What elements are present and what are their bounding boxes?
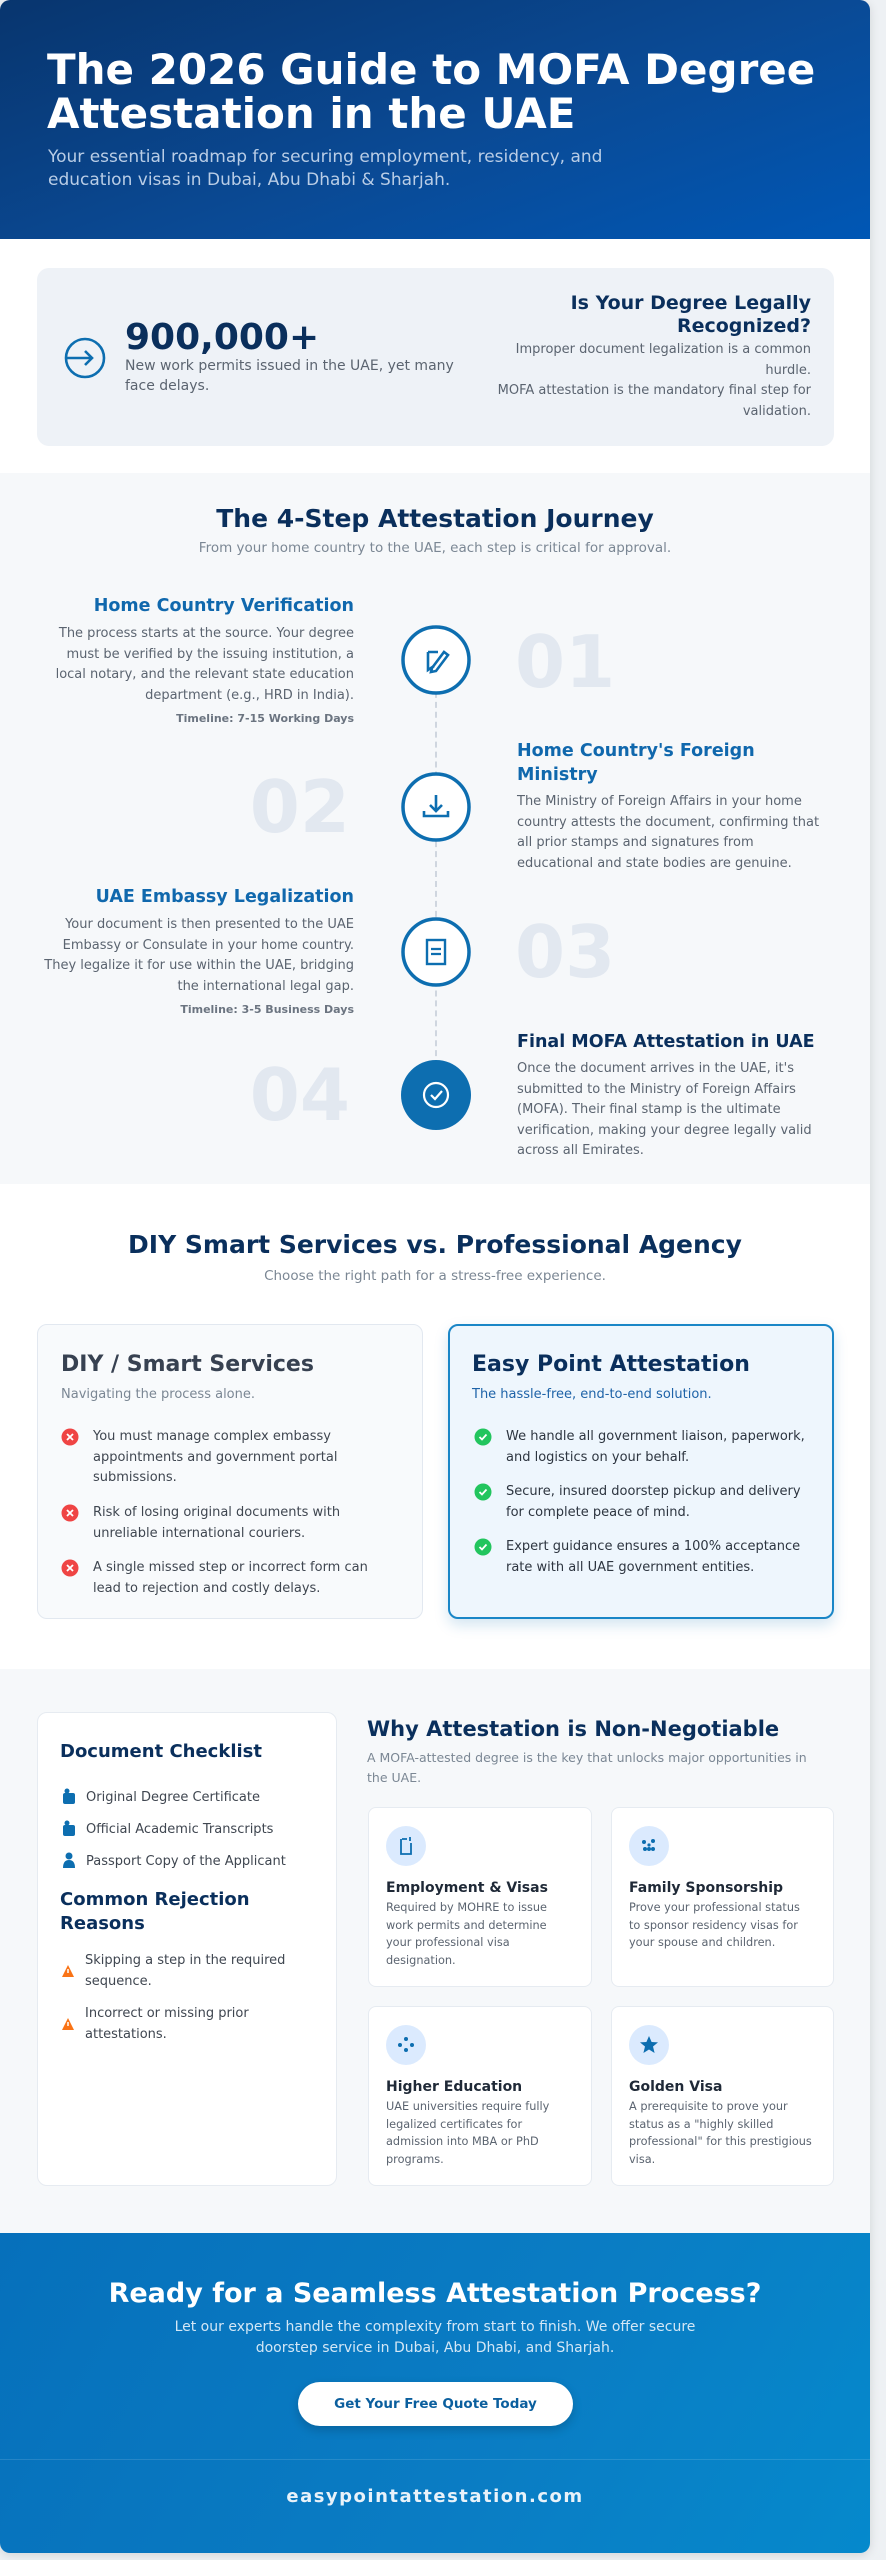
body: UAE universities require fully bbox=[386, 2100, 549, 2113]
body: your spouse and children. bbox=[629, 1936, 775, 1949]
step 1 text: Timeline: 7-15 Working Days bbox=[176, 712, 354, 725]
step 1 text: The process starts at the source. Your degree bbox=[59, 626, 354, 641]
title: Family Sponsorship bbox=[629, 1880, 783, 1896]
header banner bbox=[0, 0, 870, 239]
icon: dots bbox=[386, 2025, 426, 2065]
heading: The 4-Step Attestation Journey bbox=[216, 504, 654, 533]
comparison subheading: Choose the right path for a stress-free experience. bbox=[264, 1268, 606, 1284]
panel: checklist bbox=[37, 1712, 337, 2186]
checklist items bbox=[63, 1788, 286, 1869]
step 2 text: educational and state bodies are genuine. bbox=[517, 856, 792, 870]
step 3 text bbox=[44, 887, 354, 1016]
step 4 text: verification, making your degree legally valid bbox=[517, 1122, 812, 1138]
subheading: From your home country to the UAE, each step is critical for approval. bbox=[199, 540, 671, 556]
body: professional" for this prestigious bbox=[629, 2135, 812, 2148]
body: programs. bbox=[386, 2152, 444, 2166]
item 1: We handle all government liaison, paperwork, bbox=[506, 1429, 805, 1444]
legal recognition text: Improper document legalization is a common bbox=[516, 342, 811, 357]
subtitle: education visas in Dubai, Abu Dhabi & Sharjah. bbox=[48, 170, 450, 190]
card subtitle: Navigating the process alone. bbox=[61, 1387, 255, 1402]
step number 04: 04 bbox=[250, 1053, 350, 1137]
step 2 text: Ministry bbox=[517, 765, 598, 785]
rejection heading bbox=[60, 1889, 250, 1934]
checklist heading: Document Checklist bbox=[60, 1741, 262, 1762]
step 4 text bbox=[517, 1032, 815, 1158]
item 2 bbox=[474, 1484, 801, 1520]
title: Employment & Visas bbox=[386, 1880, 548, 1896]
step 1 text: local notary, and the relevant state education bbox=[56, 667, 354, 682]
why heading: Why Attestation is Non-Negotiable bbox=[367, 1717, 779, 1741]
step 4 text: Once the document arrives in the UAE, it's bbox=[517, 1061, 794, 1076]
body: Required by MOHRE to issue bbox=[386, 1901, 547, 1914]
title: Attestation in the UAE bbox=[47, 89, 575, 138]
icon: arrow circle bbox=[64, 338, 106, 378]
item 3 bbox=[474, 1538, 800, 1574]
icon: star bbox=[629, 2025, 669, 2065]
icon: step 3 circle bbox=[401, 917, 471, 987]
rejection item 2 bbox=[62, 2006, 249, 2042]
step 4 text: (MOFA). Their final stamp is the ultimate bbox=[517, 1102, 781, 1117]
step number 02: 02 bbox=[250, 765, 350, 849]
item 2 bbox=[62, 1504, 340, 1540]
step 2 text bbox=[516, 741, 819, 870]
step 1 text: Home Country Verification bbox=[94, 596, 354, 616]
step number 03: 03 bbox=[515, 910, 615, 994]
item 3: Expert guidance ensures a 100% acceptance bbox=[506, 1539, 800, 1554]
panel: Easy Point card bbox=[448, 1324, 834, 1619]
card: golden visa bbox=[611, 2006, 834, 2186]
step 4 text: Final MOFA Attestation in UAE bbox=[517, 1032, 815, 1052]
card: higher education bbox=[368, 2006, 592, 2186]
CTA text: Let our experts handle the complexity from start to finish. We offer secure bbox=[175, 2319, 695, 2335]
subtitle bbox=[48, 147, 602, 190]
item 2: unreliable international couriers. bbox=[93, 1526, 305, 1540]
stat caption: face delays. bbox=[125, 378, 209, 394]
body: status as a "highly skilled bbox=[629, 2118, 773, 2130]
item 1: You must manage complex embassy bbox=[93, 1429, 331, 1444]
item 1 bbox=[474, 1428, 805, 1464]
body: to sponsor residency visas for bbox=[629, 1918, 798, 1932]
item 2: Risk of losing original documents with bbox=[93, 1505, 340, 1520]
body: A prerequisite to prove your bbox=[629, 2100, 788, 2113]
item 3: rate with all UAE government entities. bbox=[506, 1560, 754, 1574]
subtitle: Your essential roadmap for securing employment, residency, and bbox=[48, 147, 602, 167]
title bbox=[47, 45, 815, 138]
step 1 text: must be verified by the issuing institution, a bbox=[66, 646, 354, 662]
body bbox=[629, 1901, 800, 1949]
bottom section background bbox=[0, 1669, 870, 2233]
title: The 2026 Guide to MOFA Degree bbox=[47, 45, 815, 94]
step 4 text: submitted to the Ministry of Foreign Affairs bbox=[517, 1082, 796, 1096]
rejection item 1 bbox=[62, 1953, 285, 1988]
card: family bbox=[611, 1807, 834, 1987]
checklist items: Original Degree Certificate bbox=[86, 1790, 260, 1805]
step 4 text: across all Emirates. bbox=[517, 1143, 644, 1158]
comparison heading: DIY Smart Services vs. Professional Agency bbox=[128, 1230, 742, 1259]
body bbox=[386, 2100, 549, 2166]
step 3 text: They legalize it for use within the UAE, bridging bbox=[44, 958, 354, 973]
step 2 text: all prior stamps and signatures from bbox=[517, 835, 754, 850]
body bbox=[386, 1901, 547, 1966]
icon: people bbox=[629, 1826, 669, 1866]
item 1: appointments and government portal bbox=[93, 1450, 337, 1464]
body: Prove your professional status bbox=[629, 1901, 800, 1914]
body: designation. bbox=[386, 1954, 456, 1966]
body: admission into MBA or PhD bbox=[386, 2135, 539, 2148]
icon: step 4 filled circle bbox=[401, 1060, 471, 1130]
card title: Easy Point Attestation bbox=[472, 1352, 750, 1377]
body: work permits and determine bbox=[386, 1918, 547, 1932]
icon: step 1 circle bbox=[401, 625, 471, 695]
checklist items: Passport Copy of the Applicant bbox=[86, 1854, 286, 1869]
rejection item 2: Incorrect or missing prior bbox=[85, 2006, 249, 2021]
legal recognition text: validation. bbox=[743, 404, 811, 418]
step 2 text: Home Country's Foreign bbox=[517, 741, 755, 761]
item 3: lead to rejection and costly delays. bbox=[93, 1580, 320, 1596]
body: visa. bbox=[629, 2152, 655, 2166]
legal recognition text: Is Your Degree Legally bbox=[571, 292, 811, 314]
item 2: for complete peace of mind. bbox=[506, 1504, 690, 1520]
step 1 text bbox=[56, 596, 354, 725]
why subtext: A MOFA-attested degree is the key that unlocks major opportunities in bbox=[367, 1750, 807, 1765]
CTA button bbox=[298, 2382, 573, 2426]
step 3 text: UAE Embassy Legalization bbox=[96, 887, 354, 907]
step 3 text: the international legal gap. bbox=[177, 978, 354, 994]
item 2: Secure, insured doorstep pickup and delivery bbox=[506, 1484, 801, 1499]
card title: DIY / Smart Services bbox=[61, 1352, 314, 1377]
why subtext: the UAE. bbox=[367, 1770, 421, 1785]
CTA text bbox=[175, 2319, 695, 2356]
footer domain: easypointattestation.com bbox=[286, 2486, 584, 2507]
footer domain bbox=[0, 2459, 870, 2509]
legal recognition text bbox=[498, 292, 811, 418]
rejection item 2: attestations. bbox=[85, 2026, 167, 2042]
item 1: submissions. bbox=[93, 1470, 177, 1485]
panel: 4-step journey bbox=[0, 473, 870, 1184]
legal recognition text: hurdle. bbox=[765, 362, 811, 378]
CTA text: doorstep service in Dubai, Abu Dhabi, and Sharjah. bbox=[256, 2340, 614, 2356]
step 3 text: Timeline: 3-5 Business Days bbox=[180, 1003, 354, 1016]
step 3 text: Your document is then presented to the UAE bbox=[65, 917, 354, 932]
item 1 bbox=[62, 1428, 337, 1485]
CTA button: Get Your Free Quote Today bbox=[334, 2396, 537, 2412]
item 3: A single missed step or incorrect form can bbox=[93, 1560, 368, 1575]
stat number: 900,000+ bbox=[125, 317, 319, 358]
icon: document bbox=[386, 1826, 426, 1866]
item 1: and logistics on your behalf. bbox=[506, 1450, 689, 1464]
body bbox=[629, 2100, 812, 2166]
step number 01: 01 bbox=[515, 620, 615, 704]
stat caption bbox=[125, 358, 454, 394]
panel: DIY card bbox=[37, 1324, 423, 1619]
step 3 text: Embassy or Consulate in your home country. bbox=[63, 938, 354, 952]
item 3 bbox=[62, 1560, 368, 1596]
step 2 text: country attests the document, confirming that bbox=[517, 814, 819, 830]
panel: stat box bbox=[37, 268, 834, 446]
step 1 text: department (e.g., HRD in India). bbox=[145, 688, 354, 702]
why subtext bbox=[367, 1750, 807, 1785]
body: your professional visa bbox=[386, 1936, 510, 1949]
rejection heading: Reasons bbox=[60, 1913, 145, 1934]
card: employment bbox=[368, 1807, 592, 1987]
panel: CTA footer bbox=[0, 2233, 870, 2553]
rejection item 1: sequence. bbox=[85, 1974, 152, 1988]
legal recognition text: MOFA attestation is the mandatory final step for bbox=[498, 383, 811, 398]
icon: step 2 circle bbox=[401, 772, 471, 842]
stat caption: New work permits issued in the UAE, yet many bbox=[125, 358, 454, 374]
checklist items: Official Academic Transcripts bbox=[86, 1822, 273, 1837]
title: Higher Education bbox=[386, 2079, 522, 2095]
card subtitle: The hassle-free, end-to-end solution. bbox=[472, 1387, 712, 1402]
CTA heading: Ready for a Seamless Attestation Process? bbox=[109, 2278, 761, 2309]
rejection heading: Common Rejection bbox=[60, 1889, 250, 1910]
timeline dashed line bbox=[435, 662, 437, 1096]
step 2 text: The Ministry of Foreign Affairs in your home bbox=[517, 794, 802, 809]
legal recognition text: Recognized? bbox=[677, 315, 811, 337]
title: Golden Visa bbox=[629, 2079, 722, 2095]
rejection item 1: Skipping a step in the required bbox=[85, 1953, 285, 1968]
body: legalized certificates for bbox=[386, 2118, 522, 2130]
